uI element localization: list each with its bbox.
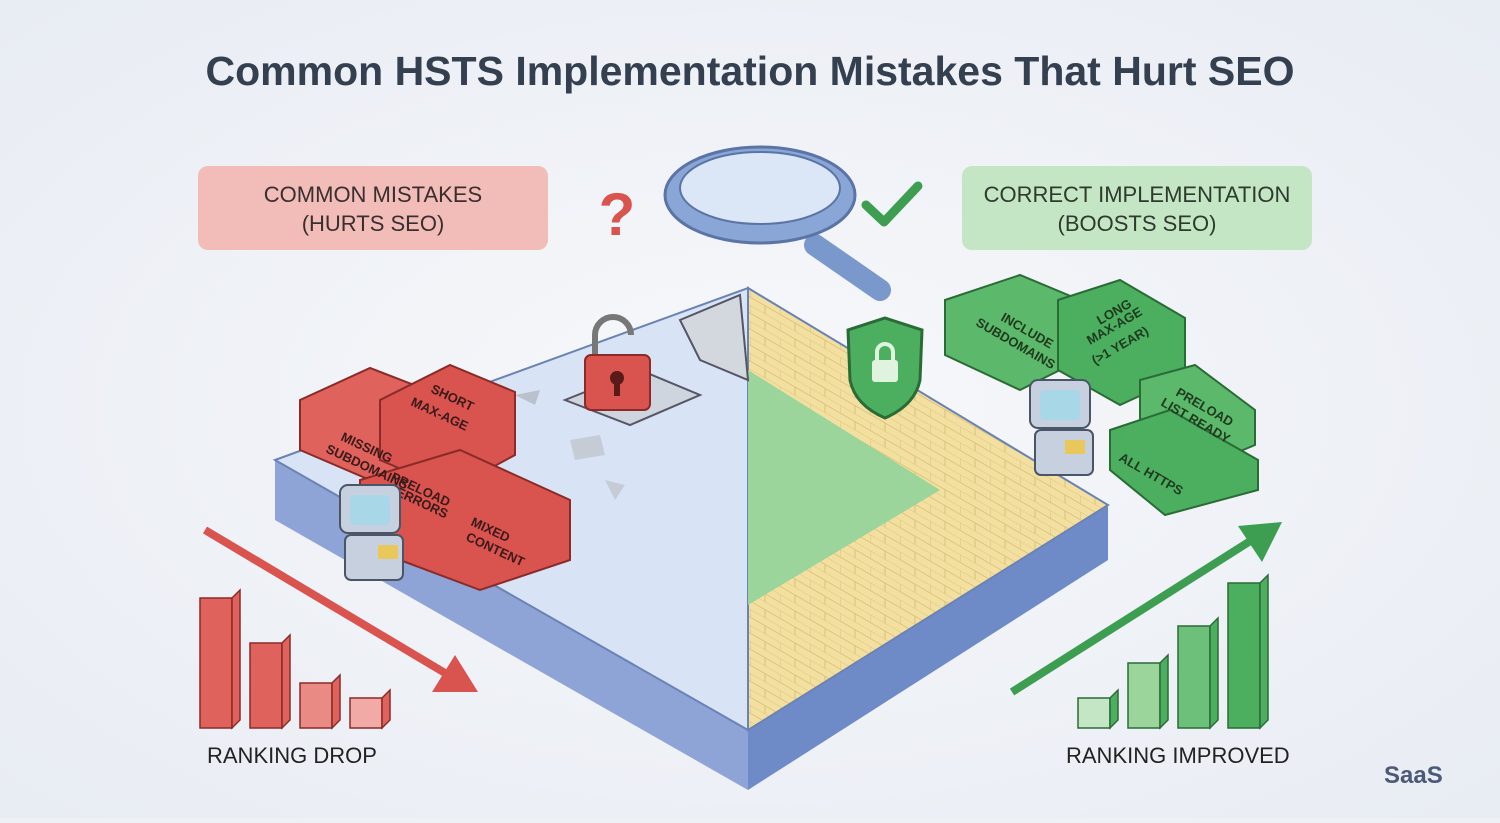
bar chart: ranking improved <box>1078 575 1268 728</box>
green blocks: PRELOAD <box>1174 385 1236 429</box>
red blocks: ERRORS <box>394 484 451 521</box>
red blocks: SUBDOMAINS <box>324 441 411 492</box>
green blocks: LONG <box>1094 296 1134 328</box>
bar chart: ranking drop <box>200 590 390 728</box>
green blocks: SUBDOMAINS <box>974 315 1058 372</box>
arrow: ranking improved <box>1012 522 1282 692</box>
panel label: common mistakes <box>198 166 548 250</box>
panel label: correct implementation: (BOOSTS SEO) <box>1058 211 1216 236</box>
logo: SaaS <box>1384 762 1443 789</box>
green blocks <box>945 275 1258 515</box>
green blocks: ALL HTTPS <box>1116 450 1186 498</box>
red blocks: CONTENT <box>464 529 527 569</box>
title: Common HSTS Implementation Mistakes That Hurt SEO <box>206 48 1294 94</box>
panel label: common mistakes: (HURTS SEO) <box>302 211 444 236</box>
red blocks <box>300 365 570 590</box>
panel label: common mistakes: COMMON MISTAKES <box>264 182 482 207</box>
icon: magnifying glass <box>665 147 880 290</box>
label: ranking improved: RANKING IMPROVED <box>1066 743 1290 768</box>
green blocks: LIST READY <box>1158 395 1233 446</box>
platform <box>275 288 1108 790</box>
red blocks: MIXED <box>469 514 512 545</box>
label: ranking drop: RANKING DROP <box>207 743 377 768</box>
arrow: ranking drop <box>205 530 478 692</box>
green blocks: INCLUDE <box>998 310 1056 352</box>
broken tiles and padlock <box>515 295 748 500</box>
red blocks: PRELOAD <box>389 469 453 510</box>
panel label: correct implementation: CORRECT IMPLEMENTATION <box>984 182 1290 207</box>
icon: question mark: ? <box>599 181 635 248</box>
robot sad <box>340 485 403 580</box>
green blocks: MAX-AGE <box>1084 304 1145 348</box>
red blocks: MISSING <box>339 429 395 466</box>
icon: check mark <box>866 186 918 222</box>
panel label: correct implementation <box>962 166 1312 250</box>
icon: shield <box>848 318 922 418</box>
green blocks: (>1 YEAR) <box>1089 323 1151 368</box>
red blocks: SHORT <box>429 381 476 414</box>
robot happy <box>1030 380 1093 475</box>
red blocks: MAX-AGE <box>409 394 471 434</box>
